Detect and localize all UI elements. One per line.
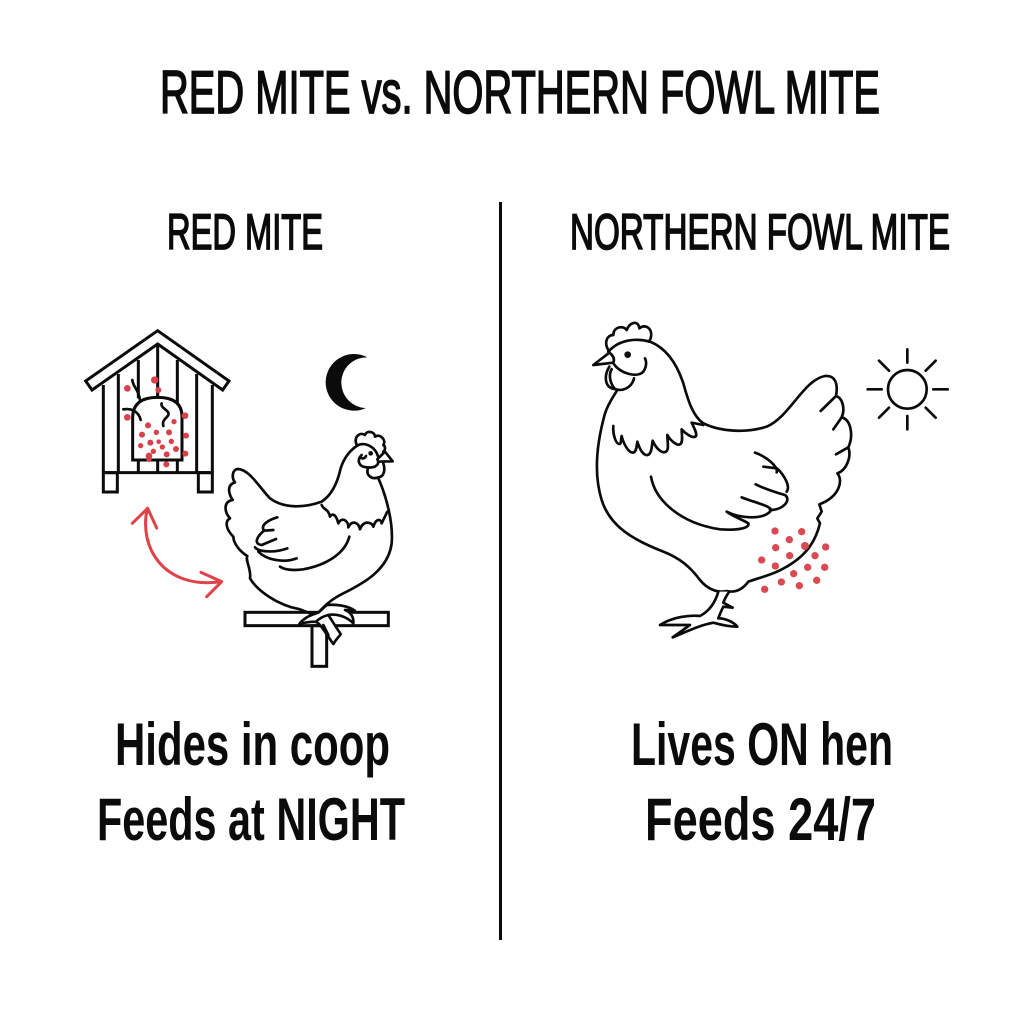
icon: moon xyxy=(326,354,367,411)
text block: red mite habits xyxy=(97,711,405,853)
text block: northern fowl mite habits: Feeds 24/7 xyxy=(645,786,876,853)
panel: red mite xyxy=(86,204,405,853)
text block: red mite habits: Hides in coop xyxy=(115,711,390,778)
illustration group: coop, moon, hen on perch xyxy=(86,331,393,666)
text block: red mite habits: Feeds at NIGHT xyxy=(97,786,405,853)
panel: northern fowl mite xyxy=(570,204,950,853)
text block: northern fowl mite habits: Lives ON hen xyxy=(631,711,893,778)
heading: red mite: RED MITE xyxy=(167,204,323,260)
icon: chicken coop with mites xyxy=(86,331,229,492)
icon: sun xyxy=(868,349,948,429)
arrow: mites move between coop and hen xyxy=(132,508,222,597)
icon: hen on perch xyxy=(226,432,393,644)
text block: northern fowl mite habits xyxy=(631,711,893,853)
mite dots on the hen xyxy=(758,527,829,593)
illustration group: hen and sun xyxy=(593,323,948,637)
divider between the two columns xyxy=(499,202,502,940)
perch xyxy=(245,612,388,666)
icon: hen with mites xyxy=(593,323,851,637)
